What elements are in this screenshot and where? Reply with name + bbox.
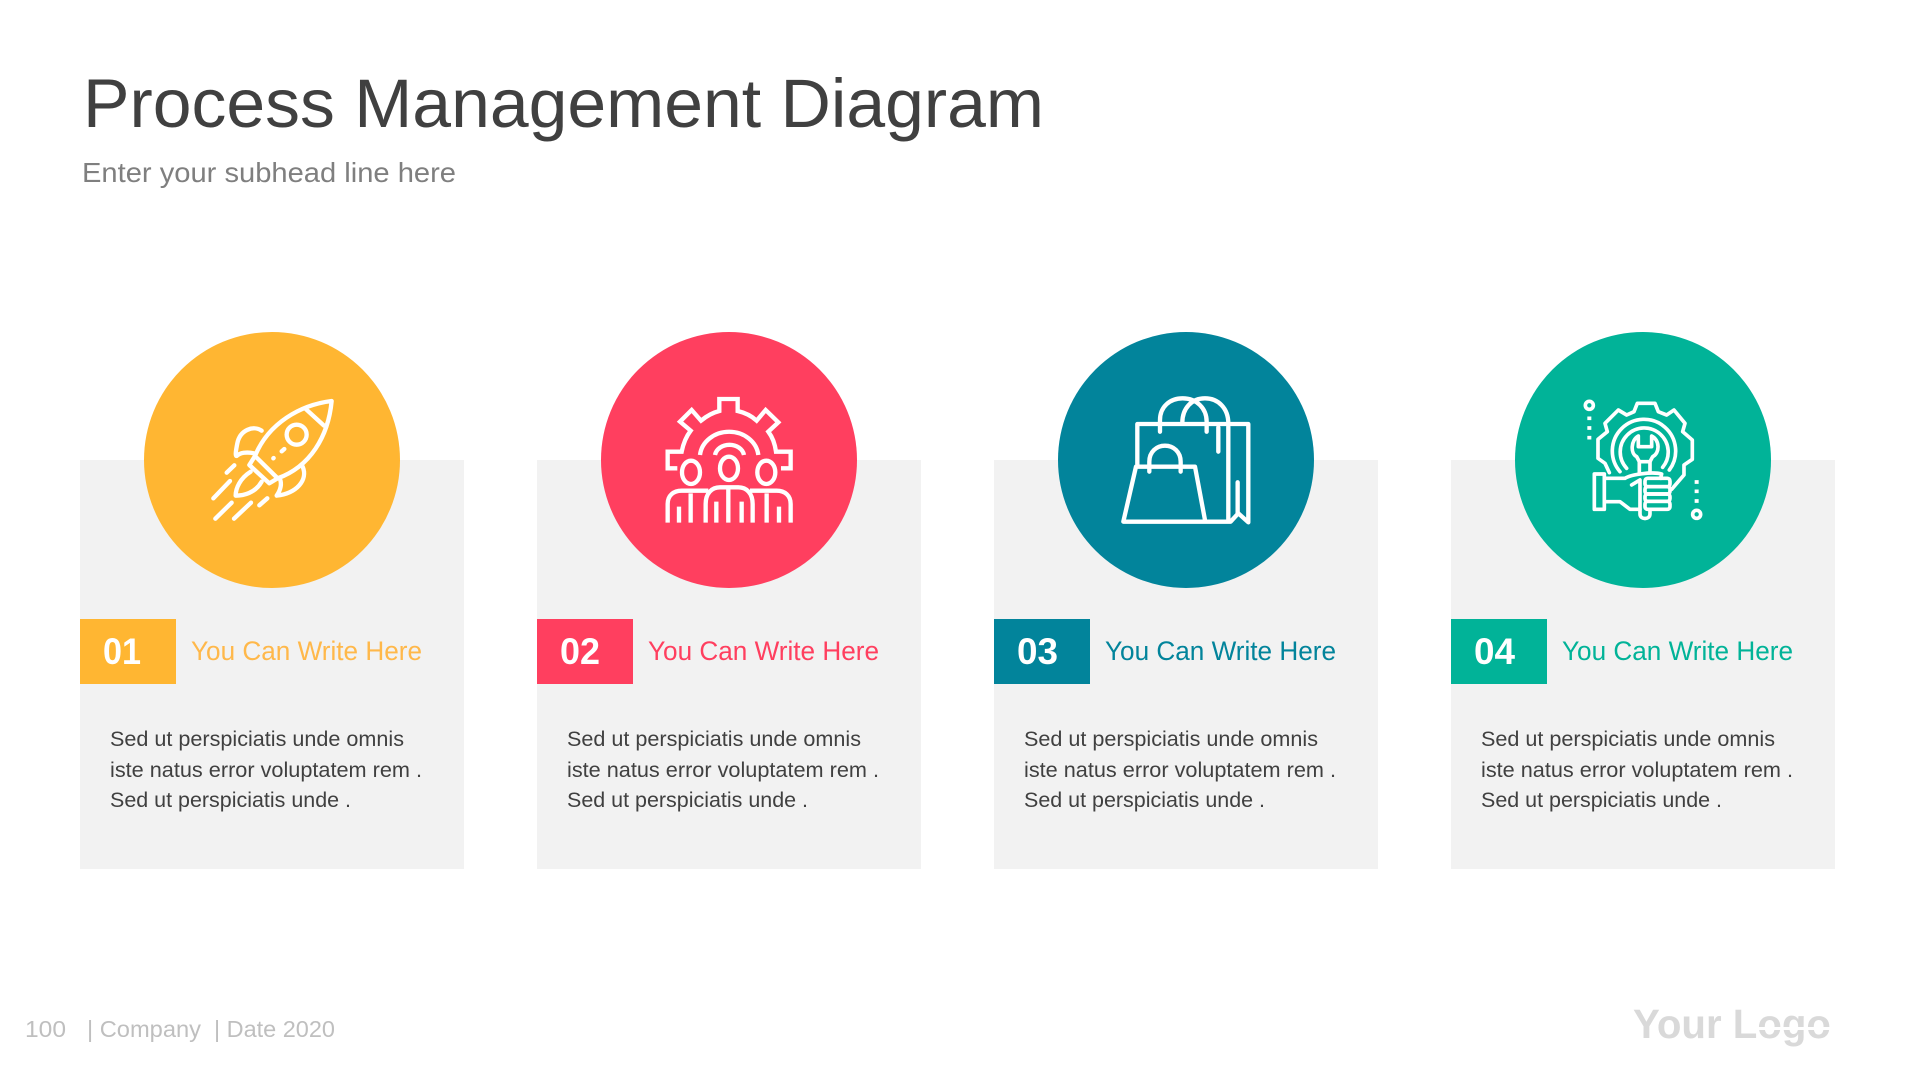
body text 01: iste natus error voluptatem rem . xyxy=(110,759,422,782)
body text 03 xyxy=(1024,728,1336,812)
panel: step 03 xyxy=(994,332,1378,869)
panel: step 02 xyxy=(537,332,921,869)
body text 02 xyxy=(567,728,879,812)
body text 03: Sed ut perspiciatis unde omnis xyxy=(1024,728,1318,751)
body text 01: Sed ut perspiciatis unde . xyxy=(110,789,351,812)
footer: page, company and date: | Date 2020 xyxy=(214,1016,335,1042)
body text 02: Sed ut perspiciatis unde . xyxy=(567,789,808,812)
title: Process Management Diagram xyxy=(83,65,1044,142)
number badge 04 xyxy=(1451,619,1547,684)
icon: gear, wrench and hand xyxy=(1585,401,1701,518)
body text 04: iste natus error voluptatem rem . xyxy=(1481,759,1793,782)
footer: page, company and date: | Company xyxy=(87,1016,202,1042)
body text 03: Sed ut perspiciatis unde . xyxy=(1024,789,1265,812)
number badge 03 xyxy=(994,619,1090,684)
number badge 02: 02 xyxy=(560,631,600,672)
logo: Your Logo xyxy=(1633,1001,1831,1047)
number badge 02 xyxy=(537,619,633,684)
body text 02: Sed ut perspiciatis unde omnis xyxy=(567,728,861,751)
heading 02: You Can Write Here xyxy=(648,636,879,666)
body text 02: iste natus error voluptatem rem . xyxy=(567,759,879,782)
number badge 04: 04 xyxy=(1474,631,1515,672)
heading 03: You Can Write Here xyxy=(1105,636,1336,666)
icon: shopping bags xyxy=(1123,398,1248,522)
icon: team and gear xyxy=(668,399,791,523)
icon: rocket xyxy=(213,401,332,519)
heading 04: You Can Write Here xyxy=(1562,636,1793,666)
body text 03: iste natus error voluptatem rem . xyxy=(1024,759,1336,782)
body text 01: Sed ut perspiciatis unde omnis xyxy=(110,728,404,751)
body text 04: Sed ut perspiciatis unde . xyxy=(1481,789,1722,812)
number badge 01 xyxy=(80,619,176,684)
number badge 01: 01 xyxy=(103,631,141,672)
panel: step 01 xyxy=(80,332,464,869)
number badge 03: 03 xyxy=(1017,631,1058,672)
body text 04: Sed ut perspiciatis unde omnis xyxy=(1481,728,1775,751)
subtitle: Enter your subhead line here xyxy=(82,157,456,188)
footer: page, company and date: 100 xyxy=(25,1016,66,1042)
panel: step 04 xyxy=(1451,332,1835,869)
body text 01 xyxy=(110,728,422,812)
heading 01: You Can Write Here xyxy=(191,636,422,666)
body text 04 xyxy=(1481,728,1793,812)
footer: page, company and date xyxy=(25,1016,335,1042)
